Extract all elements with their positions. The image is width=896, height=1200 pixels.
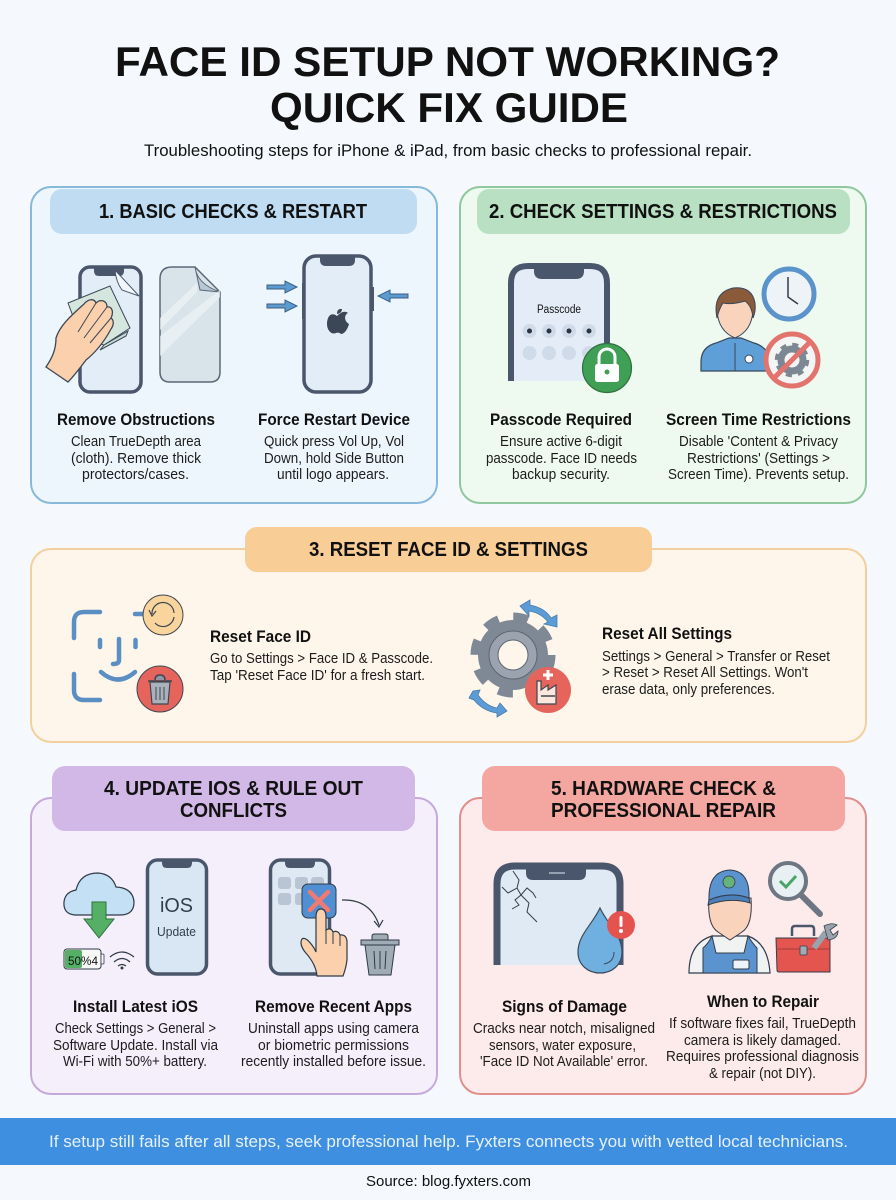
heading: section 3 xyxy=(245,527,652,572)
title: QUICK FIX GUIDE xyxy=(270,84,628,131)
text: reset face id xyxy=(210,627,433,684)
text: signs of damage: Cracks near notch, misaligned xyxy=(473,1021,655,1037)
text: screen time restrictions: Disable 'Content & Privacy xyxy=(679,434,839,450)
text: remove obstructions xyxy=(57,410,215,483)
footer banner xyxy=(0,1118,896,1165)
icon: gear with arrows and factory badge xyxy=(469,600,571,717)
text: force restart: Down, hold Side Button xyxy=(264,451,404,467)
text: force restart: until logo appears. xyxy=(277,467,389,483)
text: signs of damage: Signs of Damage xyxy=(502,997,627,1016)
text: passcode required xyxy=(486,410,637,483)
subtitle: Troubleshooting steps for iPhone & iPad, from basic checks to professional repair. xyxy=(144,141,752,160)
text: force restart: Force Restart Device xyxy=(258,410,410,429)
text: reset face id: Reset Face ID xyxy=(210,627,311,646)
icon: phone being wiped with cloth and screen protector xyxy=(46,267,220,392)
icon: person with clock and blocked gear xyxy=(701,269,818,386)
text: screen time restrictions: Screen Time). Prevents setup. xyxy=(668,467,849,483)
text: when to repair: & repair (not DIY). xyxy=(709,1066,816,1082)
text: when to repair: Requires professional diagnosis xyxy=(666,1049,859,1065)
text: remove obstructions: Clean TrueDepth area xyxy=(71,434,202,450)
heading: section 2 xyxy=(477,189,850,234)
text: remove recent apps: Uninstall apps using camera xyxy=(248,1021,420,1037)
text: remove obstructions: (cloth). Remove thick xyxy=(71,451,202,467)
text: passcode required: backup security. xyxy=(512,467,610,483)
icon: cracked phone with water drop xyxy=(497,866,635,973)
text: reset face id: Tap 'Reset Face ID' for a fresh start. xyxy=(210,668,425,684)
text: reset all settings: erase data, only preferences. xyxy=(602,682,775,698)
text: remove recent apps: Remove Recent Apps xyxy=(255,997,412,1016)
text: install latest ios: Wi-Fi with 50%+ battery. xyxy=(63,1054,207,1070)
panel: 5 hardware check xyxy=(460,766,866,1094)
text: when to repair: camera is likely damaged. xyxy=(684,1033,841,1049)
text: force restart xyxy=(258,410,410,483)
icon: cloud download, battery and wifi with ios phone: Update xyxy=(157,924,196,939)
icon: technician with magnifier and toolbox xyxy=(689,863,838,973)
text: passcode required: passcode. Face ID needs xyxy=(486,451,637,467)
text: remove recent apps: recently installed before issue. xyxy=(241,1054,426,1070)
text: reset all settings: Settings > General > Transfer or Reset xyxy=(602,649,830,665)
panel: 3 reset face id xyxy=(31,527,866,742)
heading: section 3: 3. RESET FACE ID & SETTINGS xyxy=(309,539,588,561)
heading: section 4: CONFLICTS xyxy=(180,800,287,822)
text: reset all settings: > Reset > Reset All Settings. Won't xyxy=(602,665,808,681)
title xyxy=(115,38,780,131)
text: install latest ios: Check Settings > General > xyxy=(55,1021,216,1037)
footer banner: If setup still fails after all steps, seek professional help. Fyxters connects you with vetted local technicians. xyxy=(49,1133,848,1151)
heading: section 1 xyxy=(50,189,417,234)
heading: section 1: 1. BASIC CHECKS & RESTART xyxy=(99,201,367,223)
text: screen time restrictions: Screen Time Restrictions xyxy=(666,410,851,429)
icon: passcode phone with lock xyxy=(511,266,632,392)
text: remove obstructions: Remove Obstructions xyxy=(57,410,215,429)
text: passcode required: Passcode Required xyxy=(490,410,632,429)
text: signs of damage xyxy=(473,997,655,1070)
text: when to repair: If software fixes fail, TrueDepth xyxy=(669,1016,856,1032)
heading: section 4: 4. UPDATE IOS & RULE OUT xyxy=(104,778,363,800)
text: screen time restrictions xyxy=(666,410,851,483)
icon: cloud download, battery and wifi with ios phone: 50%4 xyxy=(68,954,98,968)
icon: cloud download, battery and wifi with ios phone: iOS xyxy=(160,895,193,917)
text: passcode required: Ensure active 6-digit xyxy=(500,434,622,450)
heading: section 5 xyxy=(482,766,845,831)
text: remove obstructions: protectors/cases. xyxy=(82,467,189,483)
text: signs of damage: 'Face ID Not Available' error. xyxy=(480,1054,648,1070)
text: remove recent apps xyxy=(241,997,426,1070)
panel: 4 update ios xyxy=(31,766,437,1094)
source line: Source: blog.fyxters.com xyxy=(366,1173,531,1190)
icon: passcode phone with lock: Passcode xyxy=(537,304,581,316)
heading: section 4 xyxy=(52,766,415,831)
panel: 1 basic checks xyxy=(31,187,437,503)
title: FACE ID SETUP NOT WORKING? xyxy=(115,38,780,85)
text: when to repair: When to Repair xyxy=(707,992,819,1011)
heading: section 5: PROFESSIONAL REPAIR xyxy=(551,800,777,822)
text: when to repair xyxy=(666,992,859,1082)
text: reset all settings: Reset All Settings xyxy=(602,624,732,643)
icon: phone with side button arrows xyxy=(267,256,408,392)
text: install latest ios: Install Latest iOS xyxy=(73,997,198,1016)
icon: face id frame with refresh and trash xyxy=(74,595,183,712)
icon: finger deleting app into trash xyxy=(270,860,399,976)
text: remove recent apps: or biometric permissions xyxy=(258,1038,409,1054)
icon: cloud download, battery and wifi with ios phone xyxy=(64,860,206,974)
text: install latest ios xyxy=(53,997,219,1070)
text: screen time restrictions: Restrictions' (Settings > xyxy=(687,451,830,467)
heading: section 2: 2. CHECK SETTINGS & RESTRICTIONS xyxy=(489,201,837,223)
text: signs of damage: sensors, water exposure, xyxy=(489,1038,636,1054)
text: install latest ios: Software Update. Install via xyxy=(53,1038,219,1054)
text: force restart: Quick press Vol Up, Vol xyxy=(264,434,404,450)
text: reset face id: Go to Settings > Face ID & Passcode. xyxy=(210,651,433,667)
panel: 2 settings and restrictions xyxy=(460,187,866,503)
text: reset all settings xyxy=(602,624,830,698)
heading: section 5: 5. HARDWARE CHECK & xyxy=(551,778,776,800)
